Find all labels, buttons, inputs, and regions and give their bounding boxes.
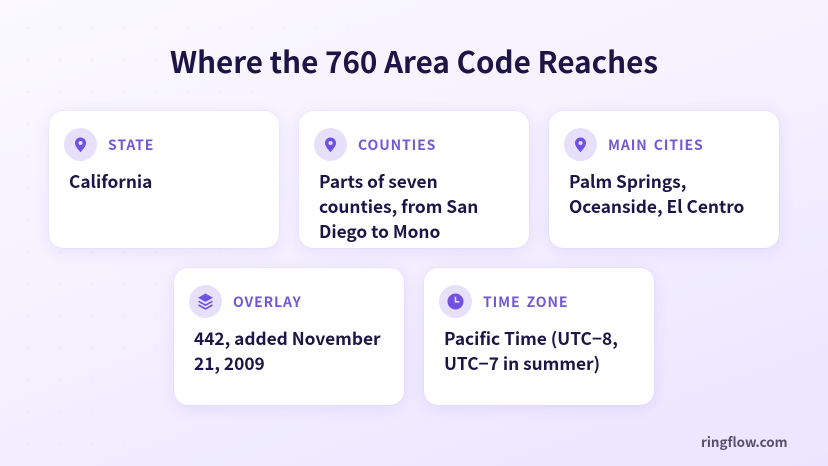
label: main cities: MAIN CITIES xyxy=(608,134,704,154)
value: time zone xyxy=(444,325,618,375)
brand footer: ringflow.com xyxy=(701,431,788,451)
icon: layers xyxy=(189,285,222,318)
panel: state xyxy=(49,111,279,248)
value: counties: Diego to Mono xyxy=(319,218,440,243)
panel: time zone xyxy=(424,268,654,405)
label: counties: COUNTIES xyxy=(358,134,436,154)
panel: main cities xyxy=(549,111,779,248)
value: overlay: 21, 2009 xyxy=(194,350,265,375)
value: main cities: Palm Springs, xyxy=(569,168,686,193)
value: overlay: 442, added November xyxy=(194,325,381,350)
label: time zone: TIME ZONE xyxy=(483,292,568,312)
value: counties: counties, from San xyxy=(319,193,478,218)
value: overlay xyxy=(194,325,381,375)
panel: counties xyxy=(299,111,529,248)
icon: clock xyxy=(439,285,472,318)
icon: map pin xyxy=(64,128,97,161)
value: counties xyxy=(319,168,478,243)
title: Where the 760 Area Code Reaches xyxy=(170,39,658,82)
label: state: STATE xyxy=(108,134,154,154)
value: time zone: Pacific Time (UTC−8, xyxy=(444,325,618,350)
icon: map pin xyxy=(564,128,597,161)
value: counties: Parts of seven xyxy=(319,168,438,193)
label: overlay: OVERLAY xyxy=(233,292,302,312)
value: time zone: UTC−7 in summer) xyxy=(444,350,600,375)
icon: map pin xyxy=(314,128,347,161)
value: state: California xyxy=(69,168,152,193)
value: main cities xyxy=(569,168,744,218)
value: main cities: Oceanside, El Centro xyxy=(569,193,744,218)
panel: overlay xyxy=(174,268,404,405)
